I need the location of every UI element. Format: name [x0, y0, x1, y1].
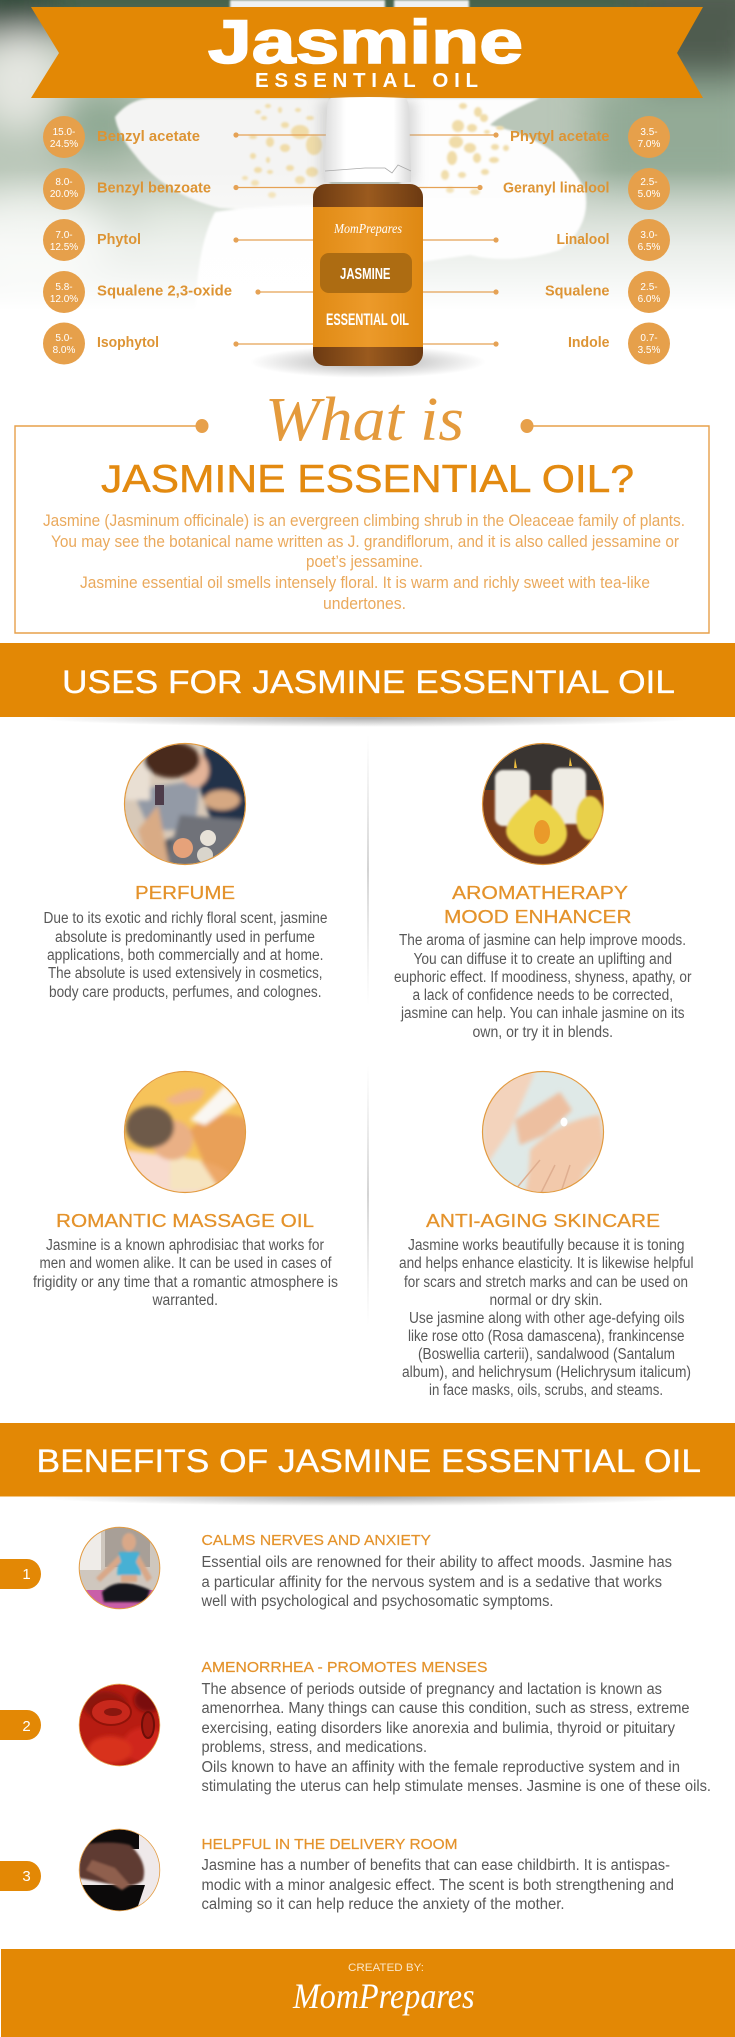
use card: aromatherapy: [394, 744, 692, 1041]
photo: woman with perfume: [124, 740, 250, 870]
ingredient badges and labels: left column: 8.0-: [55, 177, 73, 188]
body text: absolute is predominantly used in perfume: [55, 929, 315, 946]
body text: (Boswellia carterii), sandalwood (Santalum: [418, 1346, 675, 1363]
body text: euphoric effect. If moodiness, shyness, apathy, or: [394, 969, 692, 986]
use card: romantic massage oil: [33, 1072, 338, 1309]
stamens: [242, 103, 509, 199]
heading: ANTI-AGING SKINCARE: [426, 1210, 660, 1231]
title: Jasmine: Jasmine: [208, 8, 523, 76]
benefit 1: calms nerves: [0, 1527, 672, 1610]
body text: Jasmine is a known aphrodisiac that works for: [46, 1237, 324, 1254]
heading: AROMATHERAPY: [452, 882, 628, 903]
ingredient badges and labels: left column: Benzyl acetate: [97, 129, 200, 145]
number tab 3: 3: [22, 1868, 31, 1885]
body text: Oils known to have an affinity with the female reproductive system and in: [202, 1759, 680, 1776]
ingredient badges and labels: left column: 15.0-: [53, 127, 75, 138]
ingredient badges and labels: right column: 0.7-: [640, 333, 658, 344]
composition connector lines: [233, 132, 499, 347]
title ribbon: [31, 7, 703, 98]
body text: applications, both commercially and at home.: [47, 947, 324, 964]
body text: frigidity or any time that a romantic atmosphere is: [33, 1274, 338, 1291]
ingredient badges and labels: left column: [43, 116, 232, 364]
ingredient badges and labels: right column: Indole: [568, 335, 610, 351]
body text: [201, 1554, 672, 1610]
number tab 3: [0, 1861, 41, 1891]
number tab 2: [0, 1710, 41, 1740]
ingredient badges and labels: left column: 12.0%: [50, 294, 78, 305]
photo: yoga: [79, 1527, 160, 1610]
body text: stimulating the uterus can help stimulate menses. Jasmine is one of these oils.: [202, 1778, 711, 1795]
ingredient badges and labels: left column: Squalene 2,3-oxide: [97, 284, 232, 300]
body text: men and women alike. It can be used in cases of: [40, 1255, 332, 1272]
body text: calming so it can help reduce the anxiety of the mother.: [202, 1896, 564, 1913]
photo: blood cells: [79, 1684, 167, 1766]
benefit 2: amenorrhea: [0, 1660, 711, 1795]
ingredient badges and labels: left column: Isophytol: [97, 335, 159, 351]
body text: [202, 1681, 711, 1795]
essential oil bottle: MomPrepares: [333, 221, 402, 236]
ingredient badges and labels: left column: Benzyl benzoate: [97, 180, 211, 196]
number tab 2: 2: [22, 1718, 31, 1735]
body text: Essential oils are renowned for their ability to affect moods. Jasmine has: [202, 1554, 672, 1571]
body text: exercising, eating disorders like anorexia and bulimia, thyroid or pituitary: [202, 1720, 675, 1737]
essential oil bottle: ESSENTIAL OIL: [326, 310, 409, 329]
body text: [394, 932, 692, 1041]
body text: own, or try it in blends.: [472, 1024, 613, 1041]
ingredient badges and labels: right column: Phytyl acetate: [510, 129, 610, 145]
ingredient badges and labels: left column: 7.0-: [55, 230, 73, 241]
description text: poet’s jessamine.: [306, 552, 423, 571]
main heading: JASMINE ESSENTIAL OIL?: [101, 458, 634, 501]
body text: problems, stress, and medications.: [202, 1739, 427, 1756]
number tab 1: [0, 1559, 41, 1589]
ingredient badges and labels: left column: 24.5%: [50, 139, 78, 150]
body text: body care products, perfumes, and colognes.: [49, 984, 322, 1001]
body text: The aroma of jasmine can help improve moods.: [399, 932, 686, 949]
ingredient badges and labels: right column: Geranyl linalool: [503, 180, 610, 196]
description text: Jasmine (Jasminum officinale) is an evergreen climbing shrub in the Oleaceae family of plants.: [43, 511, 685, 530]
body text: [33, 1237, 338, 1309]
footer logo text: MomPrepares: [292, 1976, 474, 2016]
footer: [1, 1949, 735, 2037]
ingredient badges and labels: right column: 2.5-: [640, 177, 658, 188]
body text: Use jasmine along with other age-defying oils: [409, 1310, 685, 1327]
body text: a particular affinity for the nervous system and is a sedative that works: [202, 1574, 662, 1591]
column divider: [367, 735, 369, 1005]
body text: like rose otto (Rosa damascena), frankincense: [408, 1328, 684, 1345]
ingredient badges and labels: right column: Squalene: [545, 284, 610, 300]
body text: for scars and stretch marks and can be used on: [404, 1274, 688, 1291]
photo: candles and flowers: [482, 744, 604, 865]
body text: amenorrhea. Many things can cause this condition, such as stress, extreme: [202, 1700, 690, 1717]
body text: warranted.: [152, 1292, 218, 1309]
body text: jasmine can help. You can inhale jasmine on its: [400, 1005, 685, 1022]
body text: Jasmine has a number of benefits that can ease childbirth. It is antispas-: [202, 1857, 670, 1874]
heading: [444, 882, 632, 927]
hero background: blurred jasmine flower: [0, 0, 735, 286]
body text: in face masks, oils, scrubs, and steams.: [429, 1382, 663, 1399]
ingredient badges and labels: left column: 5.0-: [55, 333, 73, 344]
section banner: benefits: [0, 1423, 735, 1506]
ingredient badges and labels: right column: 6.5%: [638, 242, 661, 253]
ingredient badges and labels: right column: [503, 116, 670, 364]
body text: [44, 910, 328, 1001]
heading: CALMS NERVES AND ANXIETY: [202, 1533, 431, 1549]
footer credit label: CREATED BY:: [348, 1962, 424, 1974]
column divider lower: [367, 1065, 369, 1325]
body text: [399, 1237, 694, 1399]
flower petals: [114, 0, 588, 285]
body text: The absolute is used extensively in cosmetics,: [48, 965, 322, 982]
body text: The absence of periods outside of pregnancy and lactation is known as: [202, 1681, 662, 1698]
ingredient badges and labels: left column: 5.8-: [55, 282, 73, 293]
description text: Jasmine essential oil smells intensely floral. It is warm and richly sweet with tea-like: [80, 573, 650, 592]
body text: [202, 1857, 674, 1913]
ingredient badges and labels: right column: 5.0%: [638, 189, 661, 200]
body text: album), and helichrysum (Helichrysum italicum): [402, 1364, 691, 1381]
description text: [43, 511, 685, 613]
heading: PERFUME: [135, 882, 235, 903]
ingredient badges and labels: left column: 12.5%: [50, 242, 78, 253]
ingredient badges and labels: left column: Phytol: [97, 232, 141, 248]
ingredient badges and labels: left column: 8.0%: [53, 345, 76, 356]
ingredient badges and labels: right column: 7.0%: [638, 139, 661, 150]
heading: HELPFUL IN THE DELIVERY ROOM: [202, 1837, 458, 1853]
ingredient badges and labels: right column: Linalool: [556, 232, 610, 248]
body text: and helps enhance elasticity. It is likewise helpful: [399, 1255, 694, 1272]
number tab 1: 1: [22, 1566, 31, 1583]
heading: AMENORRHEA - PROMOTES MENSES: [202, 1660, 488, 1676]
script heading: What is: [265, 386, 464, 454]
ingredient badges and labels: left column: 20.0%: [50, 189, 78, 200]
description text: undertones.: [323, 594, 406, 613]
use card: perfume: [44, 740, 328, 1001]
ingredient badges and labels: right column: 3.5-: [640, 127, 658, 138]
body text: normal or dry skin.: [490, 1292, 602, 1309]
body text: well with psychological and psychosomatic symptoms.: [201, 1593, 554, 1610]
body text: a lack of confidence needs to be corrected,: [412, 987, 673, 1004]
description text: You may see the botanical name written as J. grandiflorum, and it is also called jessamine or: [51, 532, 679, 551]
ingredient badges and labels: right column: 3.0-: [640, 230, 658, 241]
essential oil bottle: [250, 97, 486, 378]
section banner: benefits: BENEFITS OF JASMINE ESSENTIAL OIL: [36, 1443, 701, 1479]
photo: hands with cream: [482, 1072, 605, 1195]
ingredient badges and labels: right column: 2.5-: [640, 282, 658, 293]
photo: massage: [124, 1072, 250, 1200]
ingredient badges and labels: right column: 3.5%: [638, 345, 661, 356]
ingredient badges and labels: right column: 6.0%: [638, 294, 661, 305]
body text: Jasmine works beautifully because it is toning: [408, 1237, 684, 1254]
benefit 3: delivery room: [0, 1829, 674, 1913]
body text: Due to its exotic and richly floral scent, jasmine: [44, 910, 328, 927]
use card: anti-aging skincare: [399, 1072, 694, 1399]
subtitle: Essential Oil: ESSENTIAL OIL: [255, 69, 478, 92]
body text: modic with a minor analgesic effect. The scent is both strengthening and: [202, 1877, 674, 1894]
heading: MOOD ENHANCER: [444, 906, 632, 927]
essential oil bottle: JASMINE: [340, 266, 391, 283]
section banner: uses: [0, 643, 735, 727]
panel: what is jasmine essential oil: [15, 386, 709, 633]
photo: pregnant belly: [79, 1829, 160, 1912]
section banner: uses: USES FOR JASMINE ESSENTIAL OIL: [62, 664, 675, 700]
body text: You can diffuse it to create an uplifting and: [414, 951, 672, 968]
heading: ROMANTIC MASSAGE OIL: [56, 1210, 314, 1231]
